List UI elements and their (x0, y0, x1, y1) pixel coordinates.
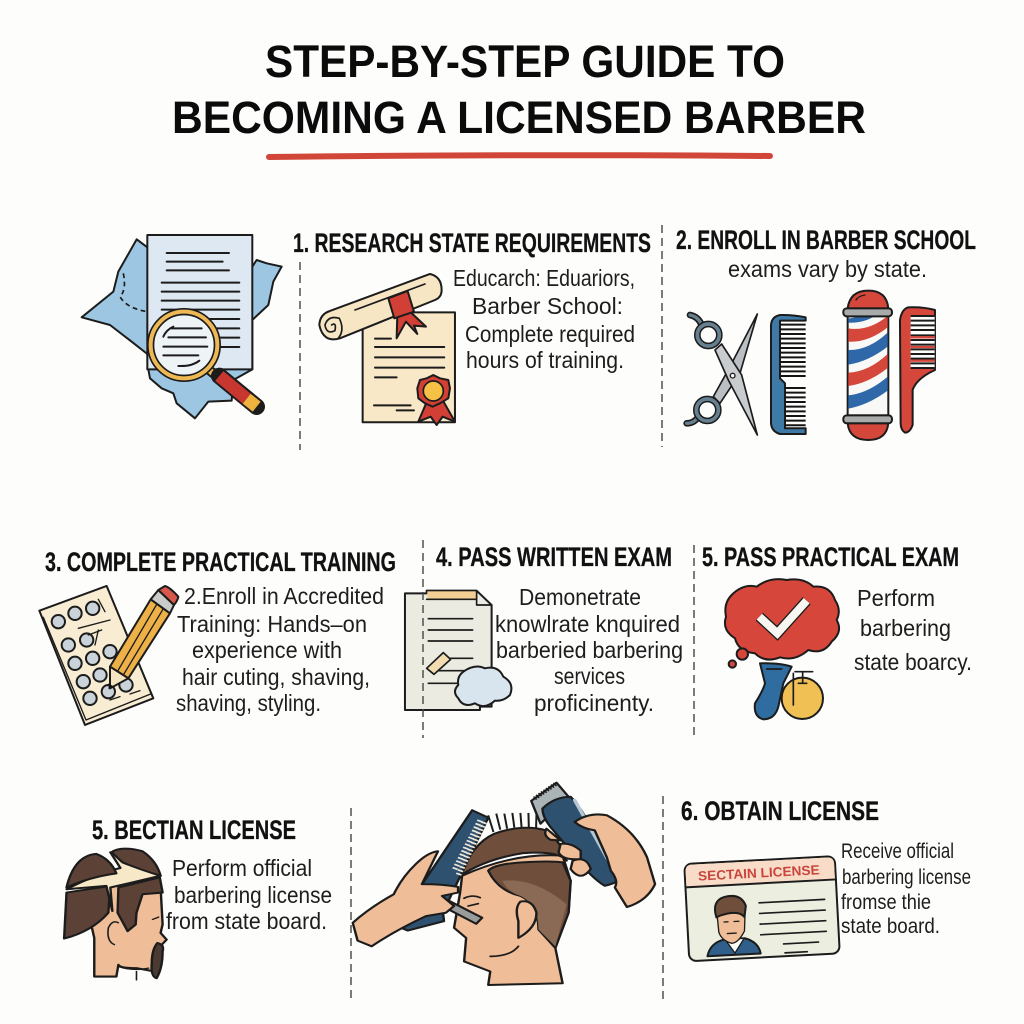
icon: map, document and magnifying glass (82, 235, 282, 418)
body text: services (554, 663, 625, 689)
title underline (269, 155, 770, 157)
body text: Training: Hands–on (177, 611, 367, 637)
body text (166, 855, 332, 934)
panel: step 2 enroll in barber school (676, 225, 976, 440)
heading: 6. OBTAIN LICENSE (681, 796, 879, 826)
body text (841, 840, 971, 938)
body text (854, 585, 972, 675)
body text (495, 584, 683, 716)
icon: scissors (687, 314, 757, 435)
body text: experience with (192, 637, 342, 663)
body text: Perform official (172, 855, 312, 881)
icon: license card (684, 856, 840, 961)
body text: hours of training. (466, 347, 624, 373)
title: BECOMING A LICENSED BARBER (172, 92, 866, 143)
body text: state board. (841, 915, 940, 938)
panel: step 5 pass practical exam (702, 542, 972, 719)
body text: Barber School: (472, 293, 623, 319)
illustration: barber cutting hair with comb and clippers (353, 783, 655, 985)
body text: barbering license (174, 882, 332, 908)
body text: Perform (857, 585, 935, 611)
icon: answer sheet and pencil (39, 586, 178, 725)
left hand (353, 851, 458, 946)
panel: step 3 complete practical training (39, 547, 396, 725)
icon: exam paper and cloud (405, 591, 511, 710)
panel: step 4 pass written exam (405, 542, 683, 716)
body text: state boarcy. (854, 649, 972, 675)
body text: shaving, styling. (176, 690, 321, 716)
icon: red comb (900, 307, 935, 433)
icon: head profile with hair sections (64, 849, 167, 980)
body text: proficinenty. (534, 690, 654, 716)
card label: SECTAIN LICENSE (698, 862, 820, 884)
body text: fromse thie (841, 891, 931, 914)
panel: step 1 research state requirements (82, 228, 651, 425)
title (172, 36, 866, 143)
body text: Educarch: Eduariors, (453, 265, 635, 291)
body text: from state board. (166, 908, 327, 934)
body text: hair cuting, shaving, (182, 664, 370, 690)
icon: blue comb (771, 315, 806, 434)
body text: Receive official (841, 840, 954, 863)
body text: 2.Enroll in Accredited (184, 583, 384, 609)
body text: knowlrate knquired (495, 611, 680, 637)
customer head (454, 813, 571, 985)
title: STEP-BY-STEP GUIDE TO (265, 36, 785, 87)
heading: 1. RESEARCH STATE REQUIREMENTS (293, 228, 651, 258)
heading: 5. BECTIAN LICENSE (92, 815, 296, 845)
body text: barbering license (842, 866, 971, 889)
body text: exams vary by state. (728, 256, 927, 282)
icon: thought bubble with check mark (725, 579, 839, 719)
body text (176, 583, 384, 716)
body text: barbering (860, 615, 951, 641)
body text: Demonetrate (519, 584, 641, 610)
heading: 3. COMPLETE PRACTICAL TRAINING (45, 547, 396, 577)
panel: step 6 obtain license (681, 796, 971, 961)
body text: barberied barbering (496, 637, 683, 663)
icon: barber pole (843, 291, 892, 440)
clippers (531, 783, 621, 886)
panel: section license (64, 815, 332, 980)
comb (401, 810, 488, 931)
body text: Complete required (465, 321, 635, 347)
right hand (545, 814, 655, 907)
icon: diploma with ribbon (319, 274, 455, 425)
heading: 4. PASS WRITTEN EXAM (436, 542, 672, 572)
body text (453, 265, 635, 373)
thinning blade (442, 899, 482, 924)
